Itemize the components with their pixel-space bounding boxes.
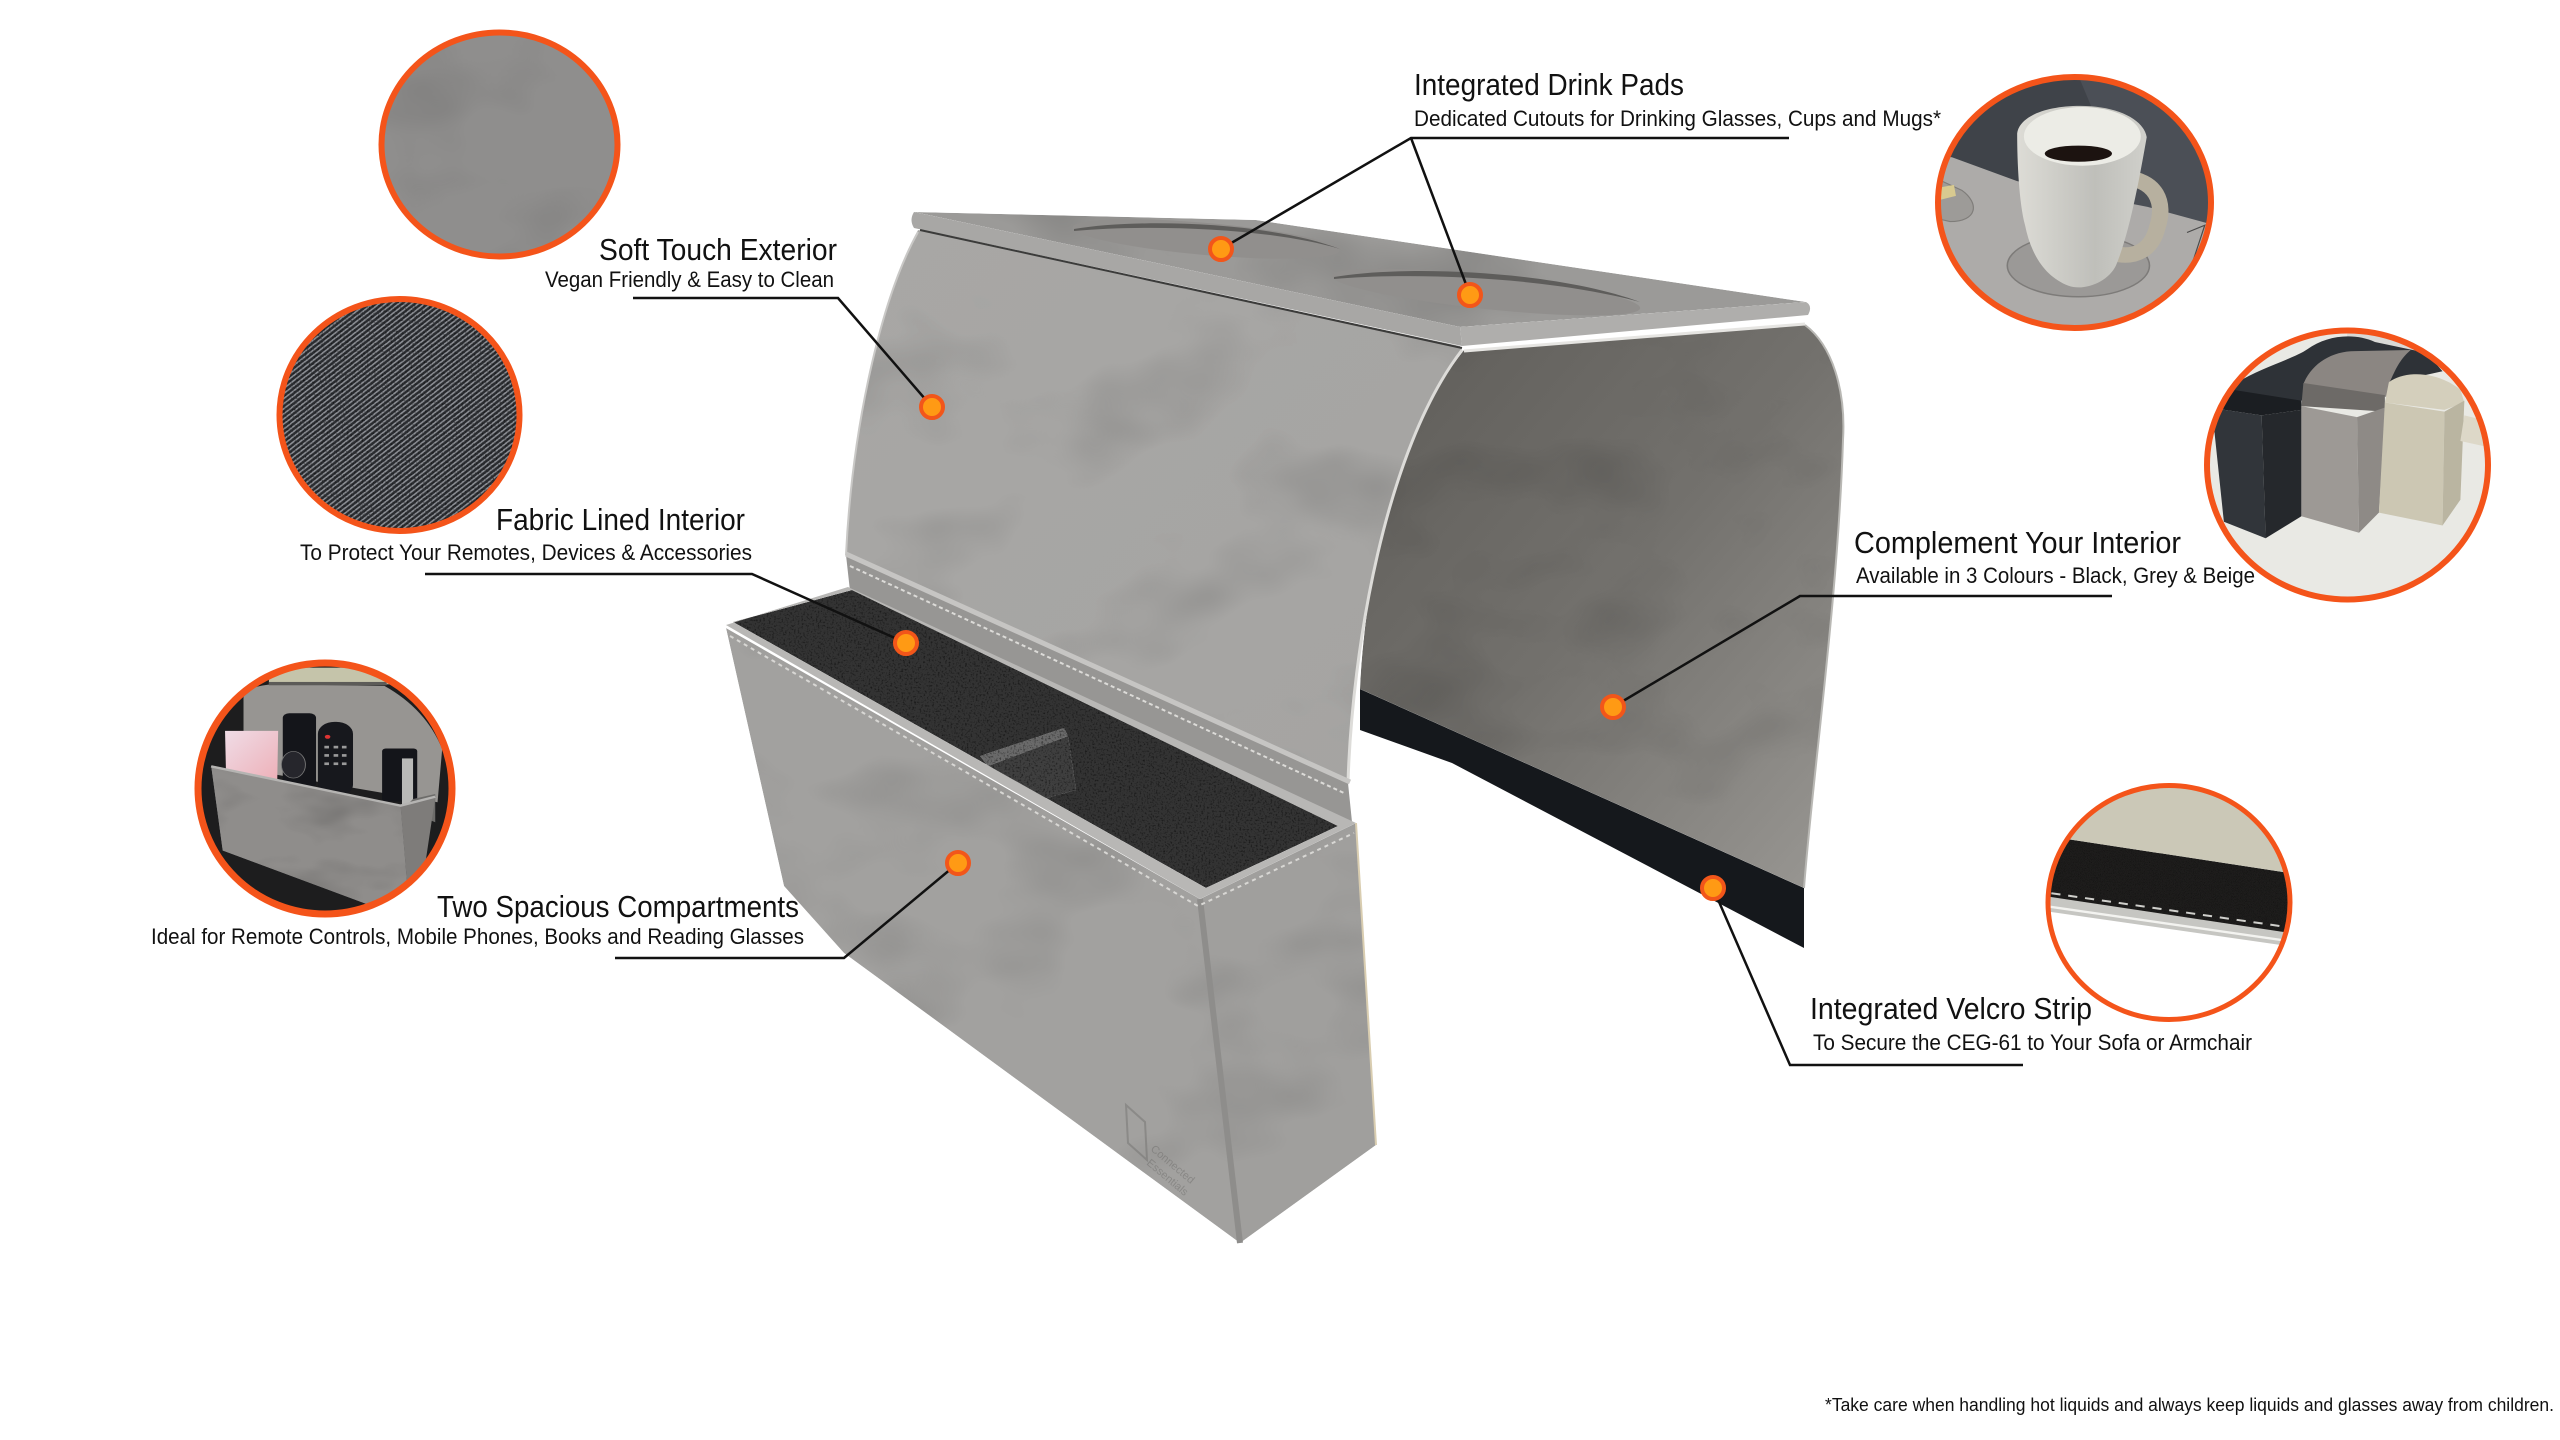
callout: complement your interior — [1602, 525, 2255, 718]
drink cutout 1 — [1071, 211, 1341, 267]
front leather panel — [846, 230, 1462, 783]
top lid — [912, 211, 1810, 348]
pocket side face — [1200, 823, 1376, 1243]
callout: soft touch exterior: Soft Touch Exterior — [599, 232, 837, 267]
callout: two spacious compartments: Two Spacious Compartments — [437, 889, 799, 924]
inner rear panel — [1360, 325, 1843, 888]
callout: two spacious compartments: Ideal for Remote Controls, Mobile Phones, Books and Reading Glasses — [151, 924, 804, 949]
callout: soft touch exterior — [545, 232, 943, 418]
pocket back band — [846, 554, 1352, 829]
pocket front face — [726, 628, 1240, 1243]
inset: three colour options — [2204, 327, 2494, 603]
callout: integrated drink pads: Dedicated Cutouts for Drinking Glasses, Cups and Mugs* — [1414, 106, 1941, 131]
inset: velcro close-up — [2046, 781, 2294, 1024]
callout: two spacious compartments — [151, 852, 969, 958]
pocket stitching — [730, 636, 1354, 906]
inset: fabric lining — [277, 297, 522, 533]
pocket rim — [726, 587, 1356, 899]
brand mark: Connected — [1148, 1143, 1197, 1187]
inset: soft touch leather — [379, 30, 620, 260]
pocket fabric interior — [733, 590, 1338, 888]
callout: integrated velcro strip — [1702, 877, 2252, 1065]
brand mark — [1126, 1105, 1197, 1199]
callout: integrated velcro strip: Integrated Velcro Strip — [1810, 991, 2092, 1026]
inset: remotes in pocket — [195, 660, 456, 918]
pocket divider — [980, 728, 1076, 800]
callout: complement your interior: Available in 3 Colours - Black, Grey & Beige — [1856, 563, 2255, 588]
product: sofa armrest organiser — [726, 211, 1843, 1243]
brand mark: Essentials — [1144, 1157, 1191, 1199]
callout: integrated drink pads: Integrated Drink Pads — [1414, 67, 1684, 102]
inset: mug on drink pad — [1934, 71, 2215, 339]
footnote: *Take care when handling hot liquids and always keep liquids and glasses away from children. — [1825, 1395, 2554, 1415]
callout: integrated drink pads — [1210, 67, 1941, 306]
velcro strip — [1360, 689, 1804, 948]
callout: fabric lined interior — [300, 502, 917, 654]
callout: soft touch exterior: Vegan Friendly & Easy to Clean — [545, 267, 834, 292]
callout: integrated velcro strip: To Secure the CEG-61 to Your Sofa or Armchair — [1813, 1030, 2252, 1055]
callout: fabric lined interior: Fabric Lined Interior — [496, 502, 745, 537]
drink cutout 2 — [1330, 259, 1642, 325]
top edge highlight — [1464, 324, 1805, 351]
callout: fabric lined interior: To Protect Your Remotes, Devices & Accessories — [300, 540, 752, 565]
callout: complement your interior: Complement Your Interior — [1854, 525, 2181, 560]
